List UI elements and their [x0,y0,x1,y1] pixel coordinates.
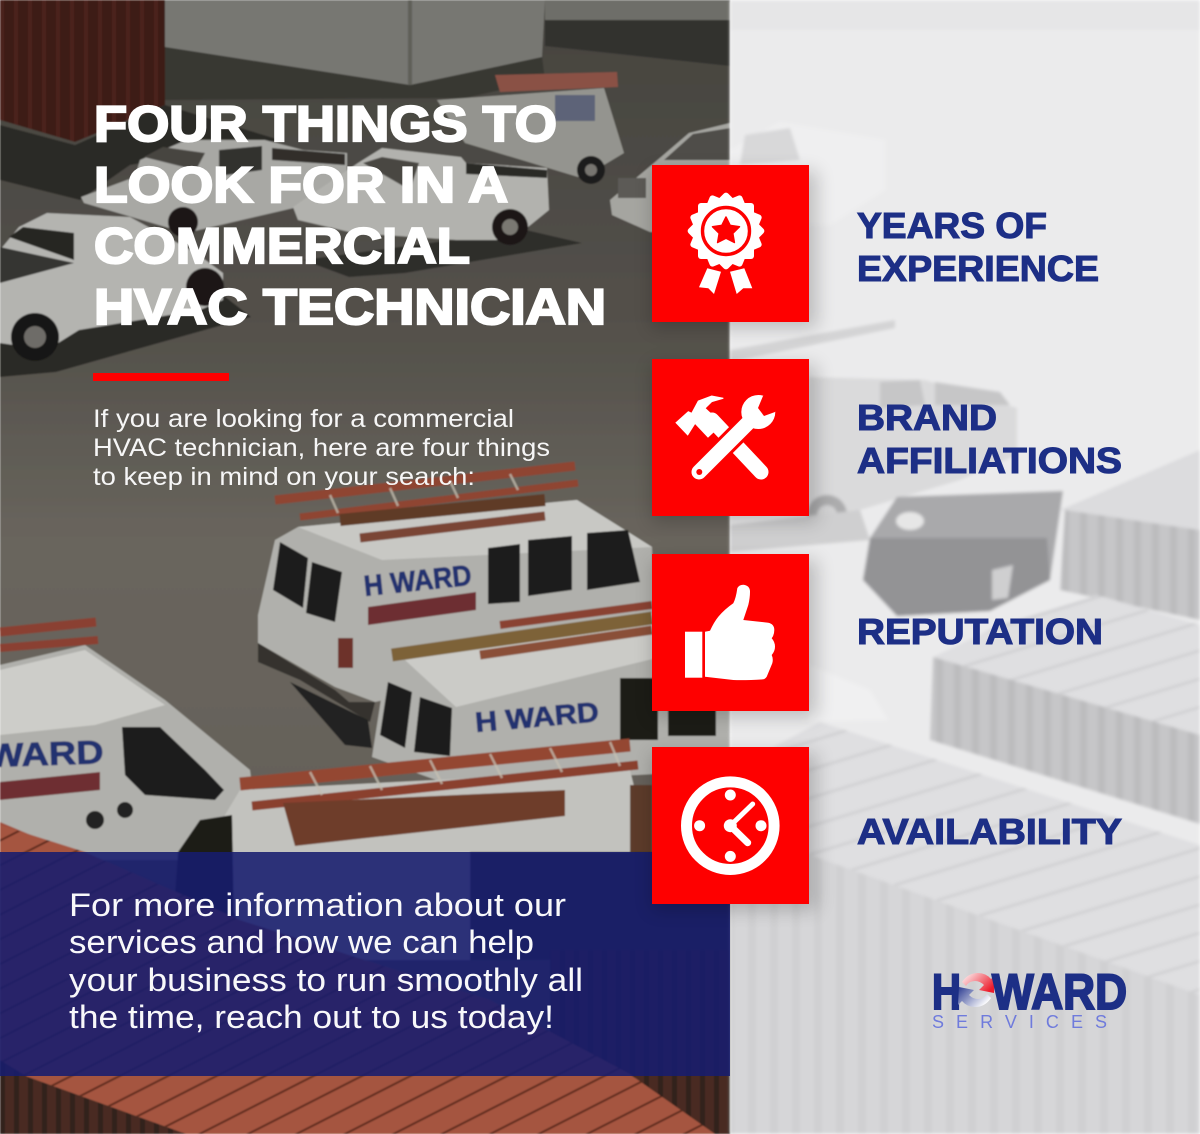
pickup 2 [293,148,549,240]
intro text: to keep in mind on your search: [93,463,475,491]
photo: pale right background with trucks and containers [730,0,1200,1134]
orange corner [0,822,90,860]
container 2 [933,595,1200,735]
top van [437,88,624,177]
label: brand affiliations: AFFILIATIONS [857,440,1122,481]
call to action text: your business to run smoothly all [69,962,583,998]
call to action text [69,887,583,1035]
label: years of experience: EXPERIENCE [857,248,1099,289]
left pickup [0,213,223,350]
right pickup [610,123,730,232]
pickup 1 [81,140,347,233]
photo: dark left background with vans and pickups [0,0,730,1134]
pale car [809,665,888,722]
white trailer [165,47,545,100]
label: years of experience: YEARS OF [857,205,1047,246]
left pickup shadow [0,295,251,377]
icon card: hammer and wrench [652,359,809,516]
ghost van [809,377,1017,528]
van D [215,770,650,960]
call to action text: the time, reach out to us today! [69,999,554,1035]
photo: dark left background with vans and pickups: H WARD [362,560,473,603]
title: HVAC TECHNICIAN [94,279,606,335]
logo: Howard Services: SERVICES [932,1012,1107,1032]
title: LOOK FOR IN A [94,157,508,213]
logo: Howard Services: H [932,964,961,1020]
photo: dark left background with vans and pickups: H WARD [474,696,600,738]
logo: Howard Services [932,964,1127,1032]
orange container roof [0,825,715,1134]
van B [372,613,730,785]
red title rule [93,373,229,381]
pale pickup top [730,122,885,225]
title: FOUR THINGS TO [94,96,557,152]
label: years of experience [857,205,1099,289]
icon card: thumbs up [652,554,809,711]
label: availability: AVAILABILITY [857,811,1122,852]
pickup shadow [303,230,582,277]
dark pickup [863,491,1063,616]
concrete gap and dark container side [550,950,730,1134]
container 1 [1060,450,1200,530]
intro text: HVAC technician, here are four things [93,434,550,462]
intro text: If you are looking for a commercial [93,405,514,433]
label: brand affiliations [857,397,1122,481]
label: brand affiliations: BRAND [857,397,997,438]
call to action text: services and how we can help [69,924,534,960]
red shipping container [0,0,165,142]
logo: Howard Services: WARD [992,964,1127,1020]
ghost ladder [730,320,895,362]
van A [258,500,655,702]
icon card shadows [652,171,817,910]
container 3 [730,722,1200,995]
title: COMMERCIAL [94,218,470,274]
label: reputation: REPUTATION [857,611,1103,652]
intro text [93,405,550,491]
call to action text: For more information about our [69,887,566,923]
ladders on van A [275,466,578,538]
icon card: clock [652,747,809,904]
title [94,96,606,335]
van C [0,645,262,860]
blue banner background [0,852,730,1076]
icon card: award badge [652,165,809,322]
